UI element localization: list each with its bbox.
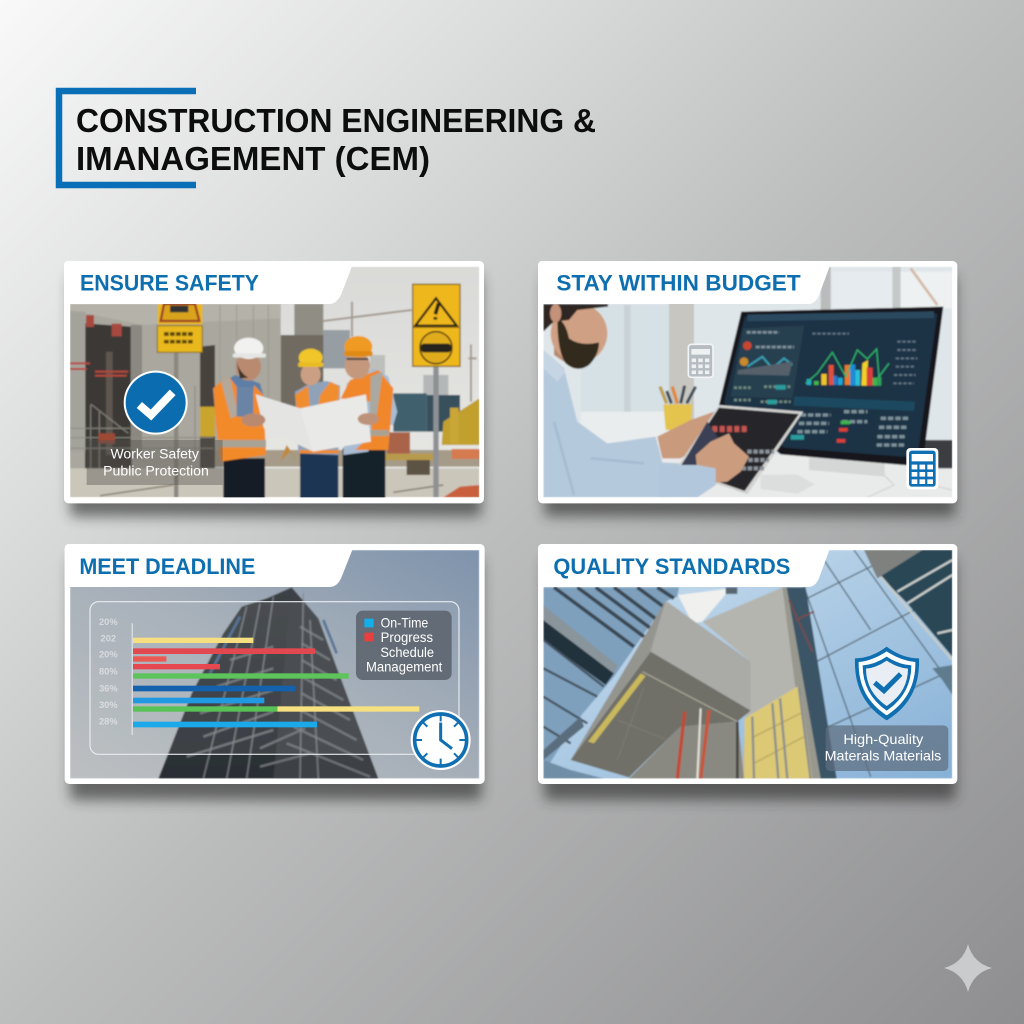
- safety caption: Worker Safety: [110, 446, 199, 462]
- dashboard bar chart: [806, 349, 889, 386]
- blueprint: [256, 394, 371, 452]
- axis labels: 20%: [99, 617, 118, 627]
- title bracket frame: [59, 91, 196, 185]
- insulation: [744, 687, 812, 779]
- photo: engineers on site: [70, 267, 482, 498]
- safety caption: Public Protection: [103, 463, 209, 479]
- left building: [543, 587, 679, 773]
- axis labels: [99, 617, 118, 727]
- icon: blue check badge: [124, 371, 188, 435]
- worker 1: [213, 338, 266, 498]
- icon: blue calculator: [906, 448, 938, 489]
- axis labels: 20%: [99, 649, 118, 659]
- man: [543, 304, 716, 497]
- axis labels: 30%: [99, 700, 118, 710]
- safety label backdrop: [87, 440, 223, 485]
- legend: Progress: [381, 630, 433, 645]
- sky gap: [678, 588, 731, 623]
- heading: quality standards: QUALITY STANDARDS: [553, 554, 790, 579]
- panel: ensure safety: [64, 261, 484, 517]
- header tab: [538, 261, 832, 304]
- axis labels: 28%: [99, 717, 118, 727]
- panel: meet deadline: [65, 544, 485, 800]
- dark side band: [787, 587, 837, 779]
- photo: concrete and glass facade: [543, 550, 952, 779]
- materials caption: Materals Materials: [825, 747, 941, 763]
- worker 3: [341, 336, 397, 498]
- tablet: [675, 405, 803, 494]
- photo: man with dashboard: [543, 267, 952, 497]
- heading: stay within budget: STAY WITHIN BUDGET: [556, 271, 801, 296]
- legend: Management: [366, 660, 443, 675]
- monitor: [719, 307, 943, 467]
- legend: On-Time: [381, 615, 428, 630]
- title: CONSTRUCTION ENGINEERING &: [76, 103, 596, 140]
- axis labels: 80%: [99, 666, 118, 676]
- header tab: [538, 544, 832, 587]
- panel: quality standards: [538, 544, 957, 800]
- header tab: [64, 261, 354, 304]
- title: IMANAGEMENT (CEM): [76, 141, 430, 178]
- axis labels: 202: [101, 633, 116, 643]
- panel: stay within budget: [538, 261, 957, 517]
- photo: high-rise tower: [70, 550, 479, 780]
- legend: [356, 611, 452, 680]
- header tab: [65, 544, 355, 587]
- left warning signs: [157, 304, 202, 352]
- legend: Schedule: [380, 645, 434, 660]
- glass grid: [803, 550, 940, 778]
- overhang: [651, 601, 751, 711]
- hand on tablet: [696, 433, 749, 483]
- right warning sign: [413, 284, 460, 366]
- axis labels: 36%: [99, 683, 118, 693]
- heading: meet deadline: MEET DEADLINE: [79, 554, 255, 579]
- back column: [702, 587, 796, 776]
- heading: ensure safety: ENSURE SAFETY: [80, 270, 259, 295]
- keyboard: [761, 474, 815, 494]
- materials caption: High-Quality: [843, 731, 923, 747]
- icon: clock: [411, 710, 471, 770]
- desk stand: [809, 457, 885, 477]
- worker 2: [295, 349, 340, 498]
- icon: faded calculator: [688, 344, 713, 377]
- title block: [59, 91, 596, 185]
- pencil cup: [660, 386, 696, 430]
- icon: quality shield: [855, 647, 919, 720]
- progress bar chart: [99, 617, 419, 735]
- chart frame: [90, 602, 459, 754]
- icon: sparkle watermark: [944, 944, 992, 992]
- materials label backdrop: [826, 725, 948, 771]
